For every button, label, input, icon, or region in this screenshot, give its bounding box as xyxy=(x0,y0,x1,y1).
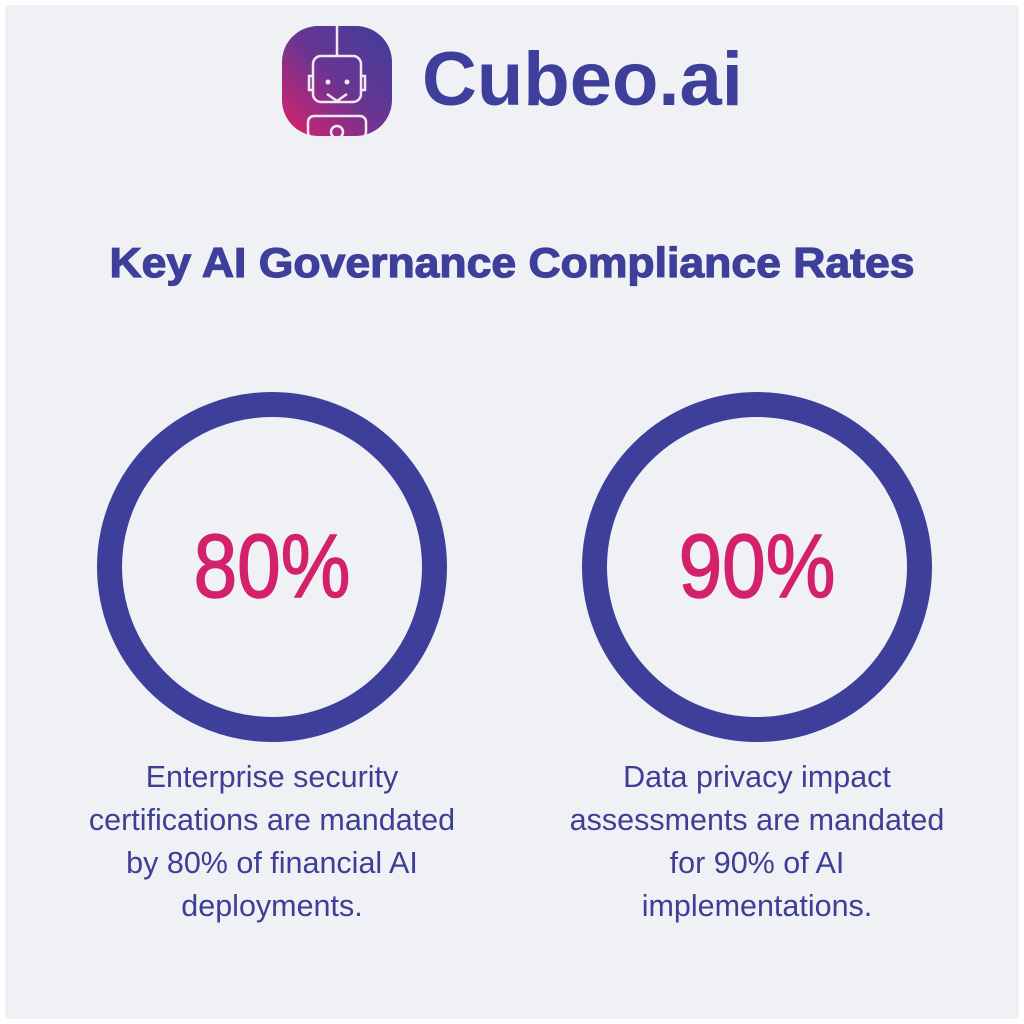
description: implementations. xyxy=(642,889,872,923)
logo text: Cubeo.ai xyxy=(422,37,743,122)
description xyxy=(89,760,455,923)
description: assessments are mandated xyxy=(570,803,944,837)
panel: 80% xyxy=(89,392,455,923)
description: Data privacy impact xyxy=(623,760,891,794)
icon: robot xyxy=(282,26,392,138)
ring xyxy=(97,392,447,742)
description: certifications are mandated xyxy=(89,803,455,837)
description: Enterprise security xyxy=(146,760,398,794)
percentage: 80% xyxy=(194,517,350,617)
logo xyxy=(282,26,743,138)
title: Key AI Governance Compliance Rates xyxy=(110,239,914,286)
percentage: 90% xyxy=(679,517,835,617)
description: by 80% of financial AI xyxy=(126,846,418,880)
description xyxy=(570,760,944,923)
description: for 90% of AI xyxy=(670,846,844,880)
description: deployments. xyxy=(181,889,363,923)
ring xyxy=(582,392,932,742)
panel: 90% xyxy=(570,392,944,923)
